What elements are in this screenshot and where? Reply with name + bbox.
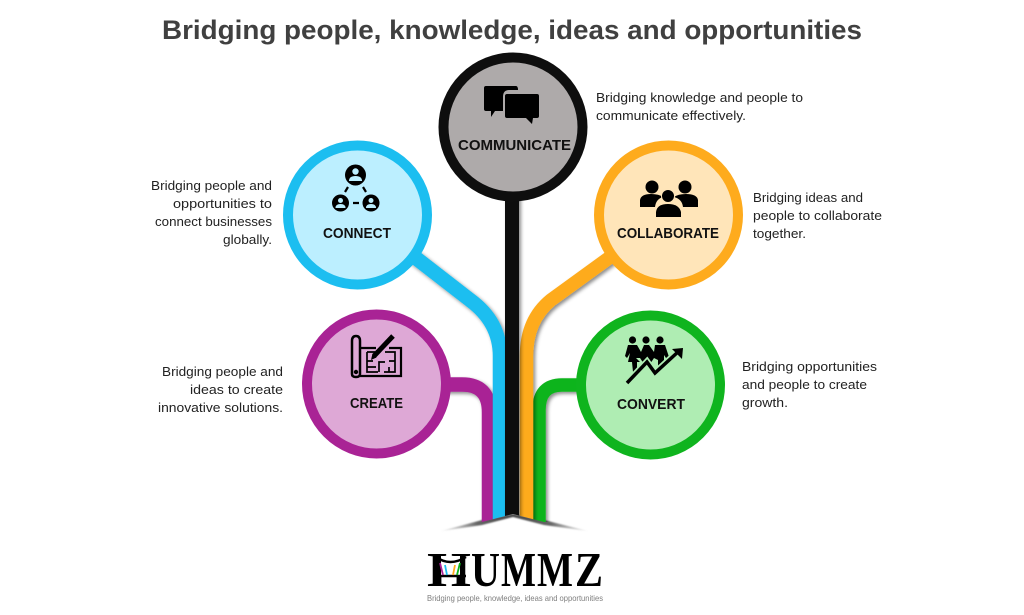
- logo: HUMMZ: H: [427, 542, 471, 597]
- text: communicate description: [596, 91, 803, 123]
- stem: collaborate: [526, 255, 613, 530]
- circle: create: [307, 314, 446, 454]
- icon: speech bubbles: [484, 86, 539, 124]
- circle: connect: CONNECT: [323, 225, 391, 242]
- text: collaborate description: [753, 191, 882, 241]
- icon: blueprint and pencil: [352, 336, 401, 377]
- circle: collaborate: COLLABORATE: [617, 225, 719, 242]
- icon: people and growth arrow: [625, 336, 683, 383]
- circle: collaborate: [599, 146, 738, 284]
- text: create description: [158, 365, 283, 415]
- text: communicate description: Bridging knowledge and people to: [596, 91, 803, 105]
- title: Bridging people, knowledge, ideas and opportunities: [162, 15, 862, 45]
- circle: convert: CONVERT: [617, 396, 685, 413]
- circle: communicate: COMMUNICATE: [458, 137, 571, 154]
- circle: communicate: [444, 58, 582, 196]
- text: create description: Bridging people and: [162, 365, 283, 379]
- text: convert description: [742, 360, 877, 410]
- text: connect description: Bridging people and: [151, 179, 272, 193]
- text: collaborate description: together.: [753, 227, 806, 241]
- text: connect description: opportunities to: [173, 197, 272, 211]
- text: connect description: connect businesses: [155, 215, 272, 229]
- icon: three people: [640, 180, 698, 217]
- circle: create: CREATE: [350, 395, 403, 412]
- logo tagline: Bridging people, knowledge, ideas and opportunities: [427, 593, 603, 603]
- logo bridge: [436, 556, 466, 576]
- text: connect description: [151, 179, 272, 247]
- logo: HUMMZ: M: [501, 542, 536, 597]
- stem: connect: [412, 255, 500, 530]
- tree base shadow: [441, 514, 588, 531]
- text: collaborate description: people to collaborate: [753, 209, 882, 223]
- logo: HUMMZ: Z: [575, 542, 603, 597]
- text: connect description: globally.: [223, 233, 272, 247]
- text: convert description: Bridging opportunities: [742, 360, 877, 374]
- text: convert description: growth.: [742, 396, 788, 410]
- text: create description: ideas to create: [190, 383, 283, 397]
- text: collaborate description: Bridging ideas and: [753, 191, 863, 205]
- text: convert description: and people to create: [742, 378, 867, 392]
- tree stems: [412, 190, 613, 530]
- stem: communicate: [505, 190, 519, 530]
- stem: create: [445, 384, 489, 530]
- circle: convert: [581, 316, 720, 454]
- logo: HUMMZ: [427, 542, 603, 603]
- circle: connect: [288, 146, 427, 284]
- logo: HUMMZ: U: [471, 542, 500, 597]
- icon: network of people: [332, 164, 380, 212]
- stem: convert: [539, 385, 582, 530]
- text: communicate description: communicate effectively.: [596, 109, 746, 123]
- text: create description: innovative solutions.: [158, 401, 283, 415]
- logo: HUMMZ: M: [537, 542, 573, 597]
